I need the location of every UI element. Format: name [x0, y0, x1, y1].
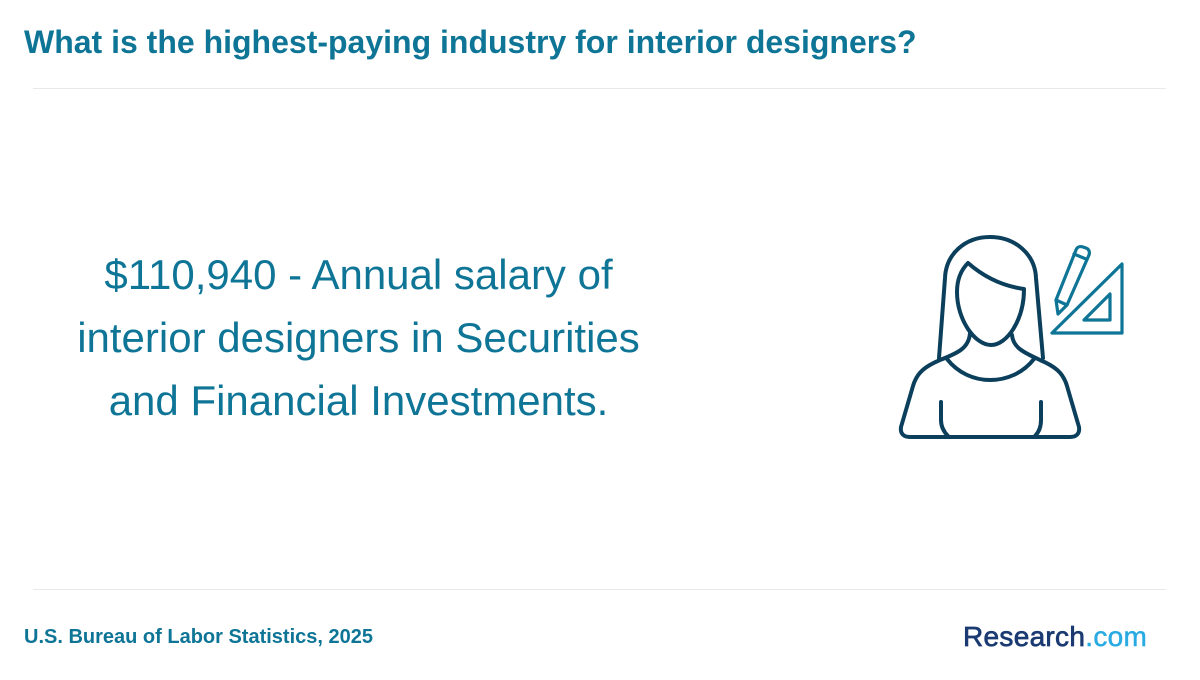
icon: woman interior designer with pencil and set square — [898, 235, 1124, 439]
main statement: $110,940 - Annual salary of — [104, 251, 613, 298]
main statement: and Financial Investments. — [109, 377, 608, 424]
main statement: interior designers in Securities — [77, 314, 640, 361]
logo: Research.com: Research.com — [963, 621, 1147, 652]
icon: pencil and set square — [1052, 247, 1122, 333]
main statement — [77, 251, 640, 424]
icon: person — [901, 237, 1079, 437]
title: What is the highest-paying industry for interior designers? — [24, 24, 917, 60]
source citation: U.S. Bureau of Labor Statistics, 2025 — [24, 626, 373, 648]
